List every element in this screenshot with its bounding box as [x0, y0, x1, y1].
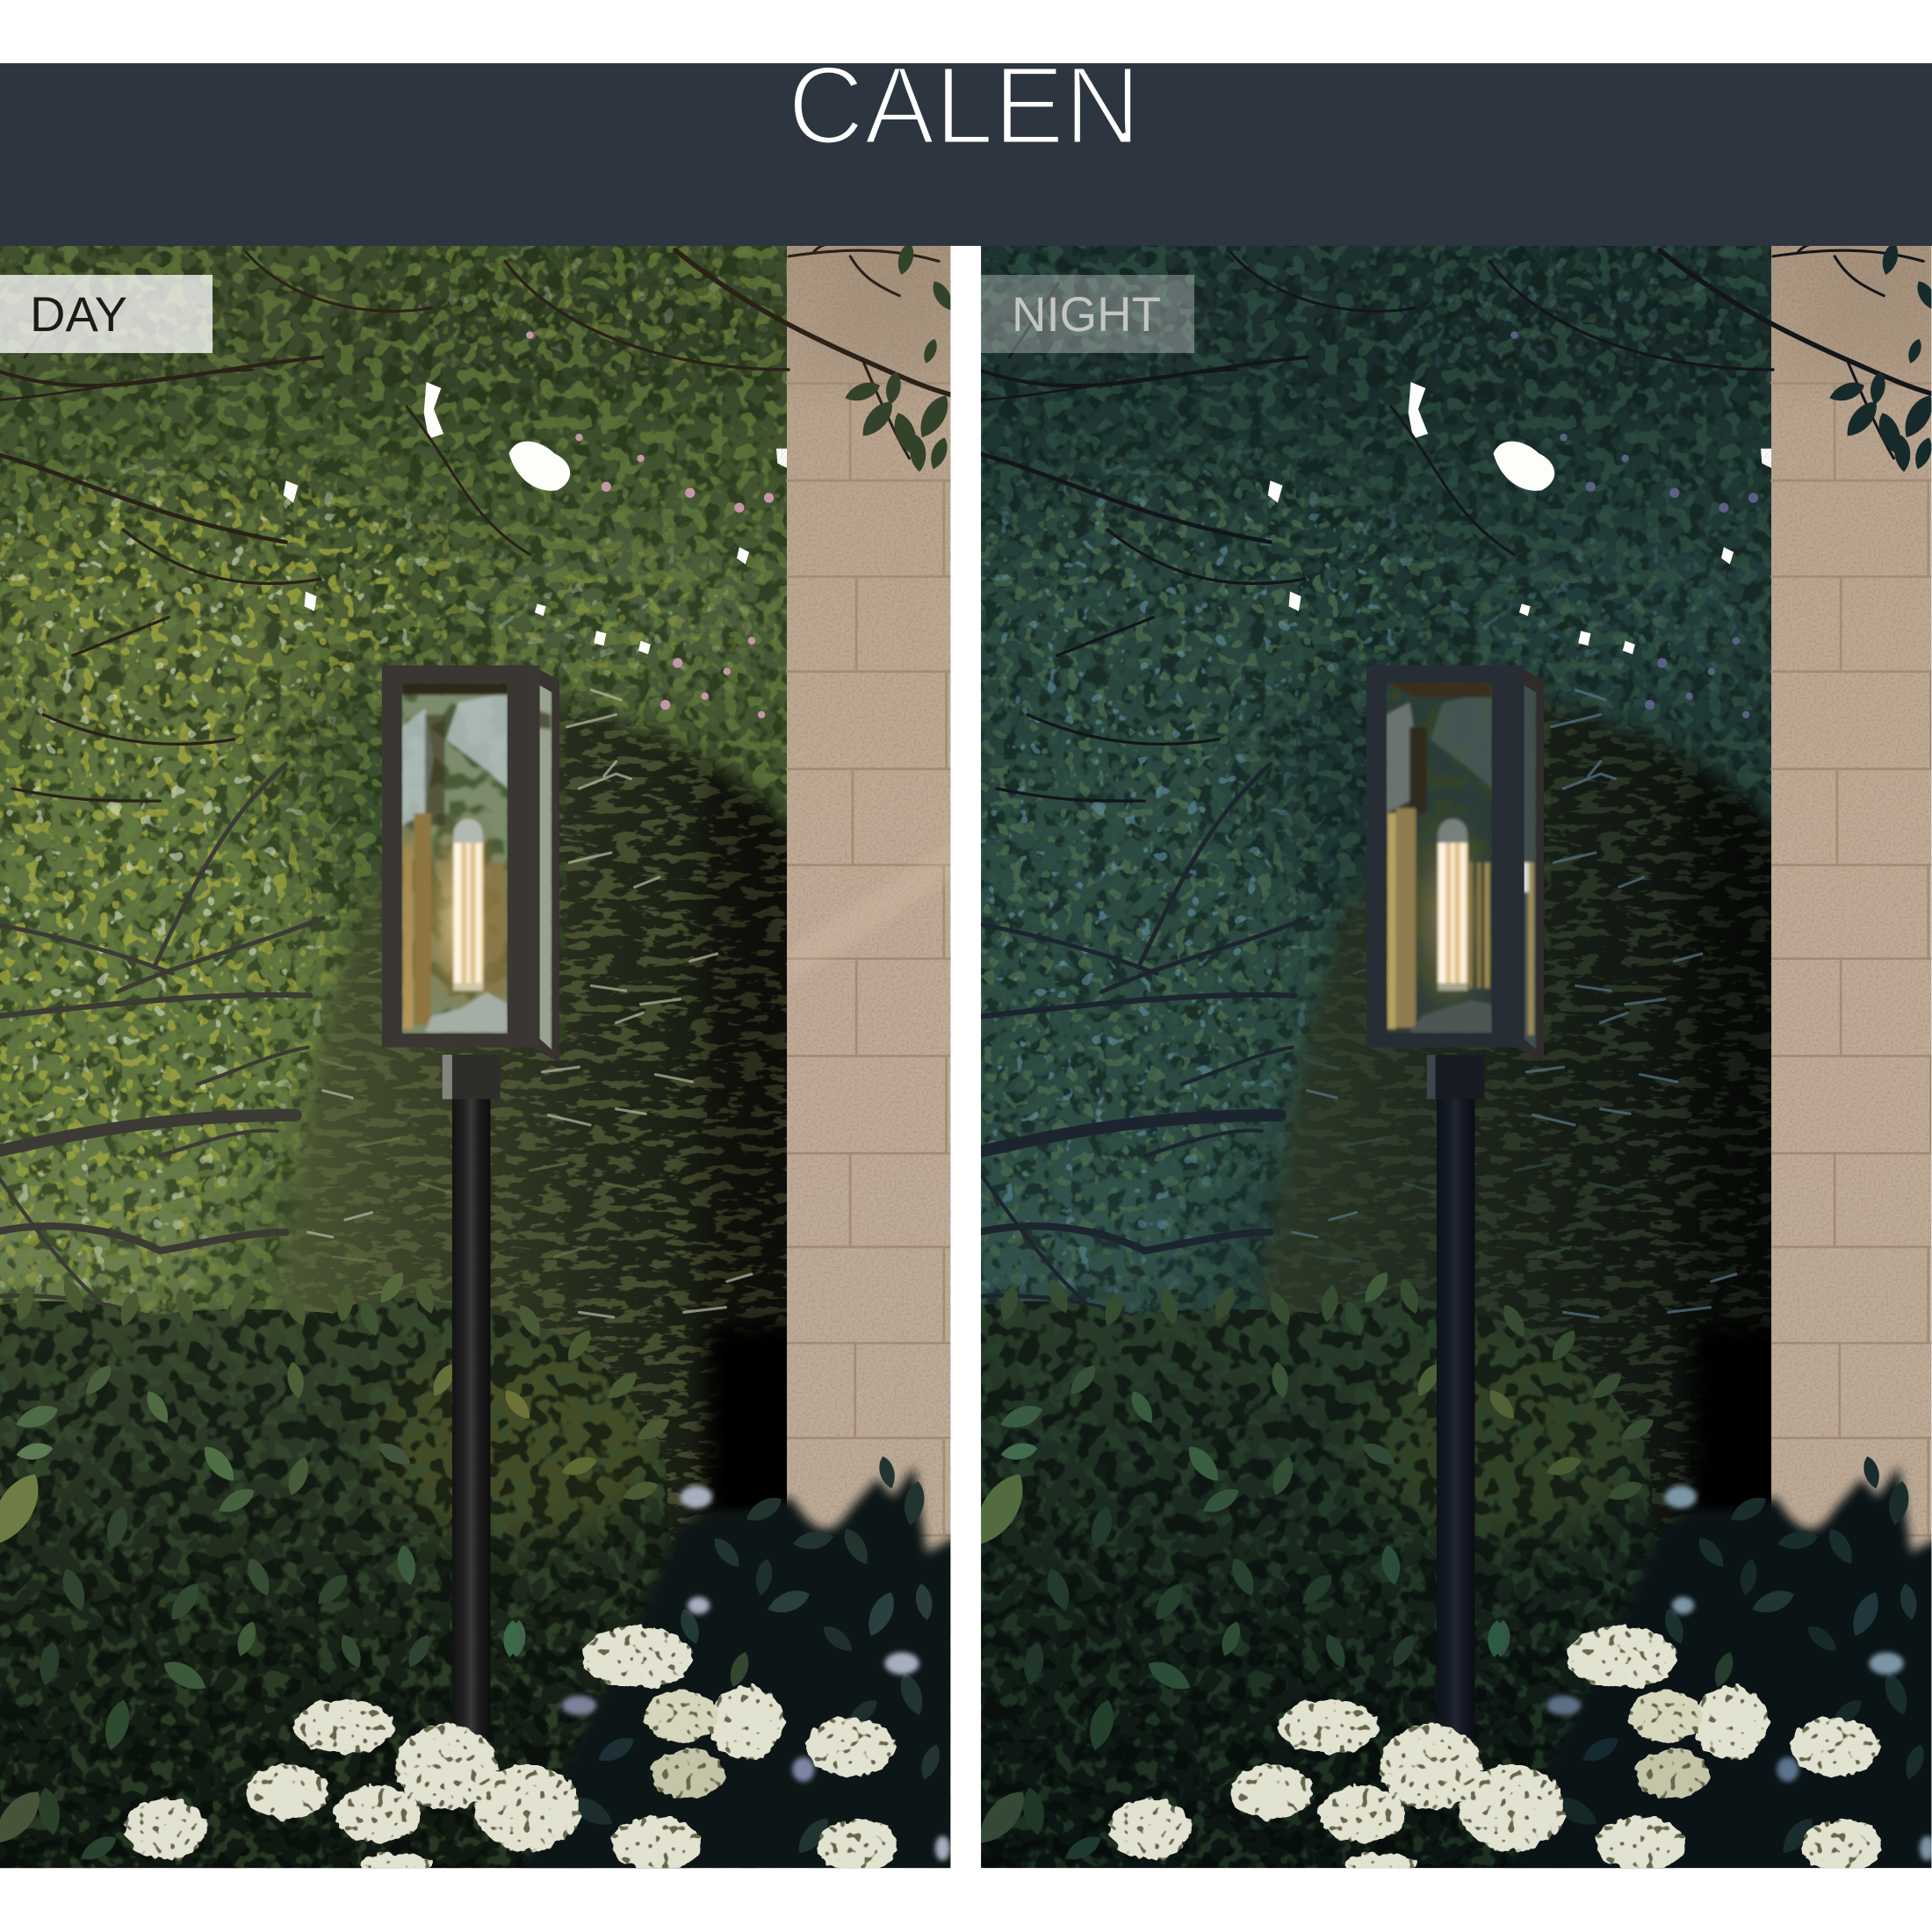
label: day: DAY: [30, 286, 127, 342]
header band: [0, 63, 1932, 246]
panel: day photo: [0, 241, 961, 1879]
panel: night photo: [981, 246, 1932, 1869]
label: night: NIGHT: [1012, 286, 1161, 342]
label: day: [0, 275, 213, 353]
label: night: [981, 275, 1194, 353]
title: CALEN: [788, 44, 1141, 167]
